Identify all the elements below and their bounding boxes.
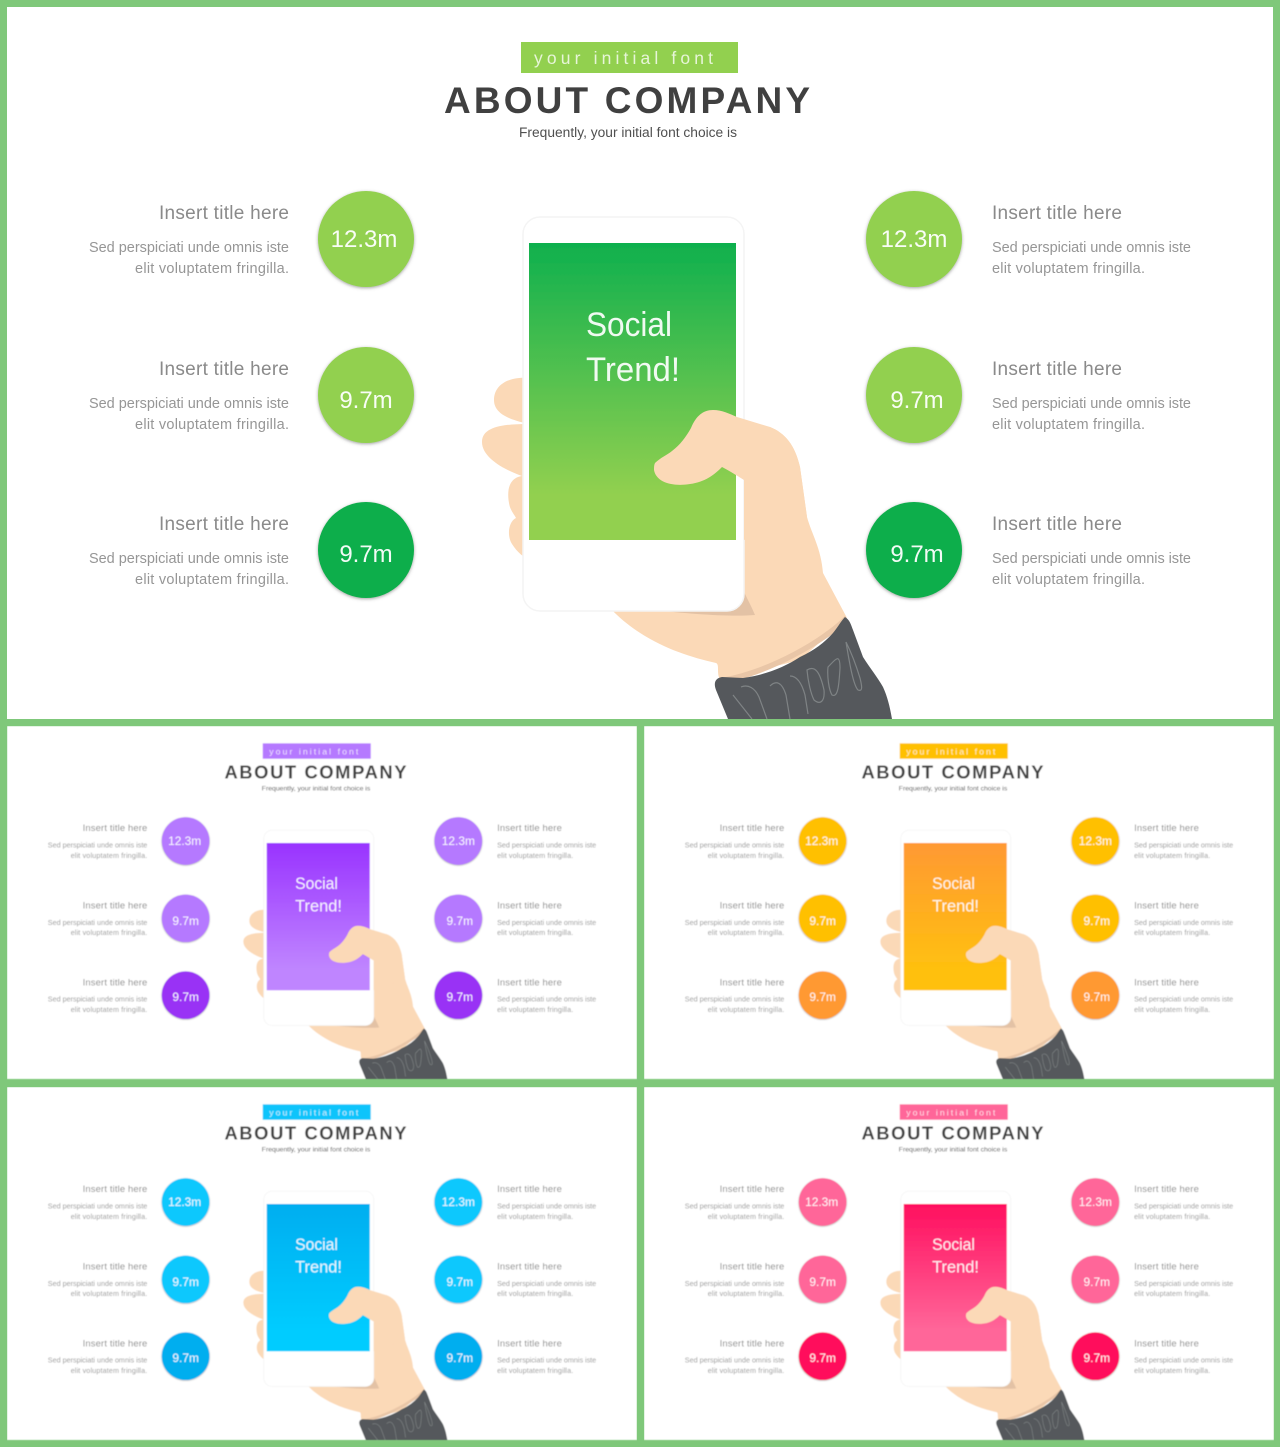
right item 3: elit voluptatem fringilla. bbox=[497, 1005, 573, 1014]
right circle 2: 9.7m bbox=[1084, 1275, 1110, 1289]
panel: green main slide bbox=[7, 7, 1273, 719]
left item 2: elit voluptatem fringilla. bbox=[71, 1289, 147, 1298]
left circle 3 bbox=[799, 971, 847, 1019]
left circle 2: 9.7m bbox=[172, 914, 199, 928]
left item 1 bbox=[48, 1183, 147, 1221]
left item 1: Sed perspiciati unde omnis iste bbox=[48, 840, 147, 849]
right circle 1 bbox=[1071, 1178, 1119, 1226]
tag: your initial font bbox=[900, 1104, 1008, 1120]
right item 2: Sed perspiciati unde omnis iste bbox=[497, 918, 596, 927]
left circle 3 bbox=[162, 971, 210, 1019]
left item 2: Sed perspiciati unde omnis iste bbox=[48, 1279, 147, 1288]
right item 3: Sed perspiciati unde omnis iste bbox=[992, 551, 1191, 567]
left circle 1 bbox=[162, 1178, 210, 1226]
subtitle: Frequently, your initial font choice is bbox=[899, 1146, 1008, 1153]
right item 1: elit voluptatem fringilla. bbox=[992, 261, 1145, 277]
left item 1: Insert title here bbox=[720, 1183, 784, 1194]
left circle 2: 9.7m bbox=[809, 914, 836, 928]
right item 3: Insert title here bbox=[1134, 1337, 1199, 1348]
tag: your initial font bbox=[900, 743, 1008, 759]
subtitle: Frequently, your initial font choice is bbox=[262, 1146, 371, 1153]
left item 3 bbox=[685, 1337, 784, 1375]
right item 2: Sed perspiciati unde omnis iste bbox=[1134, 1279, 1233, 1288]
left circle 1 bbox=[799, 1178, 847, 1226]
left circle 1 bbox=[318, 191, 414, 287]
left circle 1 bbox=[799, 817, 847, 865]
panel: pink slide bbox=[644, 1087, 1274, 1440]
tag: your initial font: your initial font bbox=[269, 1107, 359, 1117]
left circle 1: 12.3m bbox=[168, 1195, 201, 1209]
left item 1: Insert title here bbox=[83, 1183, 147, 1194]
tag: your initial font bbox=[521, 42, 738, 73]
right item 1: Insert title here bbox=[497, 1183, 562, 1194]
right circle 3 bbox=[1071, 1332, 1119, 1380]
right item 2: Sed perspiciati unde omnis iste bbox=[497, 1279, 596, 1288]
left item 2: elit voluptatem fringilla. bbox=[71, 928, 147, 937]
tag: your initial font bbox=[263, 1104, 371, 1120]
right circle 1 bbox=[434, 1178, 482, 1226]
right circle 3 bbox=[434, 1332, 482, 1380]
right circle 3: 9.7m bbox=[1084, 1351, 1110, 1365]
tag: your initial font: your initial font bbox=[269, 746, 359, 756]
left item 1 bbox=[685, 1183, 784, 1221]
left circle 3: 9.7m bbox=[809, 990, 836, 1004]
icon: hand holding phone: Social bbox=[295, 1235, 338, 1254]
left item 2 bbox=[48, 1260, 147, 1298]
left circle 3: 9.7m bbox=[172, 990, 199, 1004]
subtitle: Frequently, your initial font choice is bbox=[262, 785, 371, 792]
right item 3: Insert title here bbox=[497, 976, 562, 987]
right item 2: elit voluptatem fringilla. bbox=[1134, 928, 1210, 937]
left item 2: elit voluptatem fringilla. bbox=[135, 417, 289, 433]
panel: blue slide bbox=[7, 1087, 637, 1440]
right item 3 bbox=[992, 514, 1191, 588]
left item 2: Insert title here bbox=[720, 1260, 784, 1271]
left circle 1: 12.3m bbox=[805, 834, 838, 848]
left item 2: Sed perspiciati unde omnis iste bbox=[89, 396, 289, 412]
icon: hand holding phone bbox=[880, 830, 1084, 1079]
right circle 2: 9.7m bbox=[1084, 914, 1110, 928]
right item 1: elit voluptatem fringilla. bbox=[497, 851, 573, 860]
right item 1: Insert title here bbox=[992, 203, 1122, 224]
left item 3: elit voluptatem fringilla. bbox=[71, 1005, 147, 1014]
left item 3: Sed perspiciati unde omnis iste bbox=[685, 1356, 784, 1365]
left item 3: Insert title here bbox=[720, 976, 784, 987]
left item 3 bbox=[48, 976, 147, 1014]
right item 2 bbox=[992, 359, 1191, 433]
left circle 2: 9.7m bbox=[172, 1275, 199, 1289]
right item 3 bbox=[1134, 976, 1233, 1014]
left item 3 bbox=[48, 1337, 147, 1375]
left item 2 bbox=[685, 899, 784, 937]
left item 1: elit voluptatem fringilla. bbox=[71, 1212, 147, 1221]
icon: hand holding phone: Social bbox=[932, 1235, 975, 1254]
left circle 2 bbox=[799, 1256, 847, 1303]
right item 1: Insert title here bbox=[1134, 1183, 1199, 1194]
right item 3 bbox=[1134, 1337, 1233, 1375]
left circle 3 bbox=[162, 1332, 210, 1380]
icon: hand holding phone: Trend! bbox=[932, 896, 979, 915]
right item 3: elit voluptatem fringilla. bbox=[497, 1366, 573, 1375]
left item 2: Insert title here bbox=[83, 1260, 147, 1271]
left item 3: elit voluptatem fringilla. bbox=[708, 1366, 784, 1375]
left item 3 bbox=[89, 514, 289, 588]
left item 1: Sed perspiciati unde omnis iste bbox=[685, 840, 784, 849]
right item 3: Insert title here bbox=[497, 1337, 562, 1348]
right item 3: Sed perspiciati unde omnis iste bbox=[1134, 995, 1233, 1004]
icon: hand holding phone bbox=[482, 217, 892, 719]
right circle 1: 12.3m bbox=[881, 226, 947, 253]
right circle 1 bbox=[434, 817, 482, 865]
right item 1 bbox=[1134, 1183, 1233, 1221]
left circle 1 bbox=[162, 817, 210, 865]
right item 2 bbox=[497, 899, 596, 937]
left circle 2 bbox=[162, 895, 210, 942]
right circle 2 bbox=[434, 895, 482, 942]
tag: your initial font: your initial font bbox=[534, 48, 713, 68]
left item 2: Sed perspiciati unde omnis iste bbox=[685, 918, 784, 927]
right item 3: Sed perspiciati unde omnis iste bbox=[497, 1356, 596, 1365]
left item 2: elit voluptatem fringilla. bbox=[708, 1289, 784, 1298]
left item 2: Insert title here bbox=[720, 899, 784, 910]
right circle 3: 9.7m bbox=[447, 1351, 473, 1365]
left circle 3: 9.7m bbox=[339, 541, 393, 568]
left item 3: Insert title here bbox=[159, 514, 289, 535]
right item 3: elit voluptatem fringilla. bbox=[1134, 1005, 1210, 1014]
left item 2 bbox=[48, 899, 147, 937]
right item 1: Insert title here bbox=[1134, 822, 1199, 833]
left item 1: Insert title here bbox=[720, 822, 784, 833]
right circle 2: 9.7m bbox=[447, 1275, 473, 1289]
right item 3: Sed perspiciati unde omnis iste bbox=[1134, 1356, 1233, 1365]
icon: hand holding phone: Social bbox=[586, 306, 672, 344]
icon: hand holding phone: Trend! bbox=[586, 351, 680, 389]
right item 1 bbox=[992, 203, 1191, 277]
right item 2: Insert title here bbox=[497, 899, 562, 910]
right circle 3 bbox=[434, 971, 482, 1019]
left item 2: Sed perspiciati unde omnis iste bbox=[48, 918, 147, 927]
left item 1: elit voluptatem fringilla. bbox=[708, 851, 784, 860]
right item 1: Sed perspiciati unde omnis iste bbox=[1134, 840, 1233, 849]
left circle 2 bbox=[799, 895, 847, 942]
right item 2: Insert title here bbox=[992, 359, 1122, 380]
right circle 2 bbox=[1071, 1256, 1119, 1303]
icon: hand holding phone: Trend! bbox=[932, 1257, 979, 1276]
icon: hand holding phone bbox=[880, 1191, 1084, 1440]
right circle 1: 12.3m bbox=[1079, 1195, 1112, 1209]
left circle 1: 12.3m bbox=[805, 1195, 838, 1209]
right item 3 bbox=[497, 976, 596, 1014]
left item 3 bbox=[685, 976, 784, 1014]
icon: hand holding phone: Social bbox=[932, 874, 975, 893]
right item 2: Sed perspiciati unde omnis iste bbox=[992, 396, 1191, 412]
left circle 2 bbox=[162, 1256, 210, 1303]
icon: hand holding phone bbox=[243, 1191, 447, 1440]
subtitle: Frequently, your initial font choice is bbox=[519, 125, 737, 140]
right circle 2 bbox=[434, 1256, 482, 1303]
left item 1: Sed perspiciati unde omnis iste bbox=[685, 1201, 784, 1210]
right circle 2 bbox=[1071, 895, 1119, 942]
left circle 3 bbox=[799, 1332, 847, 1380]
left item 2: Insert title here bbox=[159, 359, 289, 380]
left item 1: Sed perspiciati unde omnis iste bbox=[89, 240, 289, 256]
title: ABOUT COMPANY bbox=[224, 762, 407, 783]
right item 1: Insert title here bbox=[497, 822, 562, 833]
left item 3: elit voluptatem fringilla. bbox=[135, 572, 289, 588]
left item 3: Sed perspiciati unde omnis iste bbox=[89, 551, 289, 567]
title: ABOUT COMPANY bbox=[444, 80, 810, 121]
right circle 3: 9.7m bbox=[447, 990, 473, 1004]
left item 2 bbox=[89, 359, 289, 433]
right item 1: Sed perspiciati unde omnis iste bbox=[497, 1201, 596, 1210]
left circle 1: 12.3m bbox=[331, 226, 397, 253]
icon: hand holding phone: Social bbox=[295, 874, 338, 893]
icon: hand holding phone bbox=[243, 830, 447, 1079]
right circle 2 bbox=[866, 347, 962, 443]
left item 2: Sed perspiciati unde omnis iste bbox=[685, 1279, 784, 1288]
right item 1: elit voluptatem fringilla. bbox=[1134, 851, 1210, 860]
title: ABOUT COMPANY bbox=[861, 762, 1044, 783]
right item 2: Insert title here bbox=[1134, 899, 1199, 910]
left item 2 bbox=[685, 1260, 784, 1298]
right item 2: Insert title here bbox=[1134, 1260, 1199, 1271]
right item 2: Sed perspiciati unde omnis iste bbox=[1134, 918, 1233, 927]
left circle 2: 9.7m bbox=[339, 387, 393, 414]
right circle 3 bbox=[866, 502, 962, 598]
left item 1 bbox=[685, 822, 784, 860]
left circle 1: 12.3m bbox=[168, 834, 201, 848]
left item 3: elit voluptatem fringilla. bbox=[71, 1366, 147, 1375]
left item 1: Insert title here bbox=[83, 822, 147, 833]
tag: your initial font bbox=[263, 743, 371, 759]
left circle 3: 9.7m bbox=[172, 1351, 199, 1365]
left item 3: Sed perspiciati unde omnis iste bbox=[685, 995, 784, 1004]
right item 2 bbox=[497, 1260, 596, 1298]
right item 3: Sed perspiciati unde omnis iste bbox=[497, 995, 596, 1004]
left item 1 bbox=[48, 822, 147, 860]
right item 1: elit voluptatem fringilla. bbox=[1134, 1212, 1210, 1221]
left item 3: Sed perspiciati unde omnis iste bbox=[48, 995, 147, 1004]
right item 3: Insert title here bbox=[992, 514, 1122, 535]
right item 1: Sed perspiciati unde omnis iste bbox=[992, 240, 1191, 256]
left item 1 bbox=[89, 203, 289, 277]
right item 2: elit voluptatem fringilla. bbox=[497, 928, 573, 937]
right item 2 bbox=[1134, 1260, 1233, 1298]
right item 1: Sed perspiciati unde omnis iste bbox=[1134, 1201, 1233, 1210]
icon: hand holding phone: Trend! bbox=[295, 1257, 342, 1276]
left item 3: Insert title here bbox=[720, 1337, 784, 1348]
left circle 2: 9.7m bbox=[809, 1275, 836, 1289]
right circle 3: 9.7m bbox=[1084, 990, 1110, 1004]
panel: purple slide bbox=[7, 726, 637, 1079]
left item 3: elit voluptatem fringilla. bbox=[708, 1005, 784, 1014]
right item 3: elit voluptatem fringilla. bbox=[1134, 1366, 1210, 1375]
right item 2 bbox=[1134, 899, 1233, 937]
panel: orange slide bbox=[644, 726, 1274, 1079]
left item 1: elit voluptatem fringilla. bbox=[71, 851, 147, 860]
right item 2: elit voluptatem fringilla. bbox=[992, 417, 1145, 433]
left item 1: elit voluptatem fringilla. bbox=[135, 261, 289, 277]
left item 2: elit voluptatem fringilla. bbox=[708, 928, 784, 937]
left item 1: Sed perspiciati unde omnis iste bbox=[48, 1201, 147, 1210]
left item 2: Insert title here bbox=[83, 899, 147, 910]
icon: hand holding phone: Trend! bbox=[295, 896, 342, 915]
right circle 1: 12.3m bbox=[442, 1195, 475, 1209]
left item 1: elit voluptatem fringilla. bbox=[708, 1212, 784, 1221]
title: ABOUT COMPANY bbox=[224, 1123, 407, 1144]
right item 2: elit voluptatem fringilla. bbox=[1134, 1289, 1210, 1298]
right circle 2: 9.7m bbox=[447, 914, 473, 928]
right circle 3: 9.7m bbox=[890, 541, 944, 568]
subtitle: Frequently, your initial font choice is bbox=[899, 785, 1008, 792]
right item 1 bbox=[497, 822, 596, 860]
right item 1 bbox=[1134, 822, 1233, 860]
right circle 1 bbox=[1071, 817, 1119, 865]
right circle 1: 12.3m bbox=[442, 834, 475, 848]
left item 3: Insert title here bbox=[83, 976, 147, 987]
left item 3: Sed perspiciati unde omnis iste bbox=[48, 1356, 147, 1365]
left circle 2 bbox=[318, 347, 414, 443]
title: ABOUT COMPANY bbox=[861, 1123, 1044, 1144]
left circle 3: 9.7m bbox=[809, 1351, 836, 1365]
tag: your initial font: your initial font bbox=[906, 746, 996, 756]
tag: your initial font: your initial font bbox=[906, 1107, 996, 1117]
right item 3: elit voluptatem fringilla. bbox=[992, 572, 1145, 588]
right item 3: Insert title here bbox=[1134, 976, 1199, 987]
right item 1: elit voluptatem fringilla. bbox=[497, 1212, 573, 1221]
right item 2: elit voluptatem fringilla. bbox=[497, 1289, 573, 1298]
left item 1: Insert title here bbox=[159, 203, 289, 224]
right item 1: Sed perspiciati unde omnis iste bbox=[497, 840, 596, 849]
right item 3 bbox=[497, 1337, 596, 1375]
right circle 1: 12.3m bbox=[1079, 834, 1112, 848]
right circle 2: 9.7m bbox=[890, 387, 944, 414]
right item 2: Insert title here bbox=[497, 1260, 562, 1271]
left item 3: Insert title here bbox=[83, 1337, 147, 1348]
right item 1 bbox=[497, 1183, 596, 1221]
right circle 1 bbox=[866, 191, 962, 287]
left circle 3 bbox=[318, 502, 414, 598]
right circle 3 bbox=[1071, 971, 1119, 1019]
